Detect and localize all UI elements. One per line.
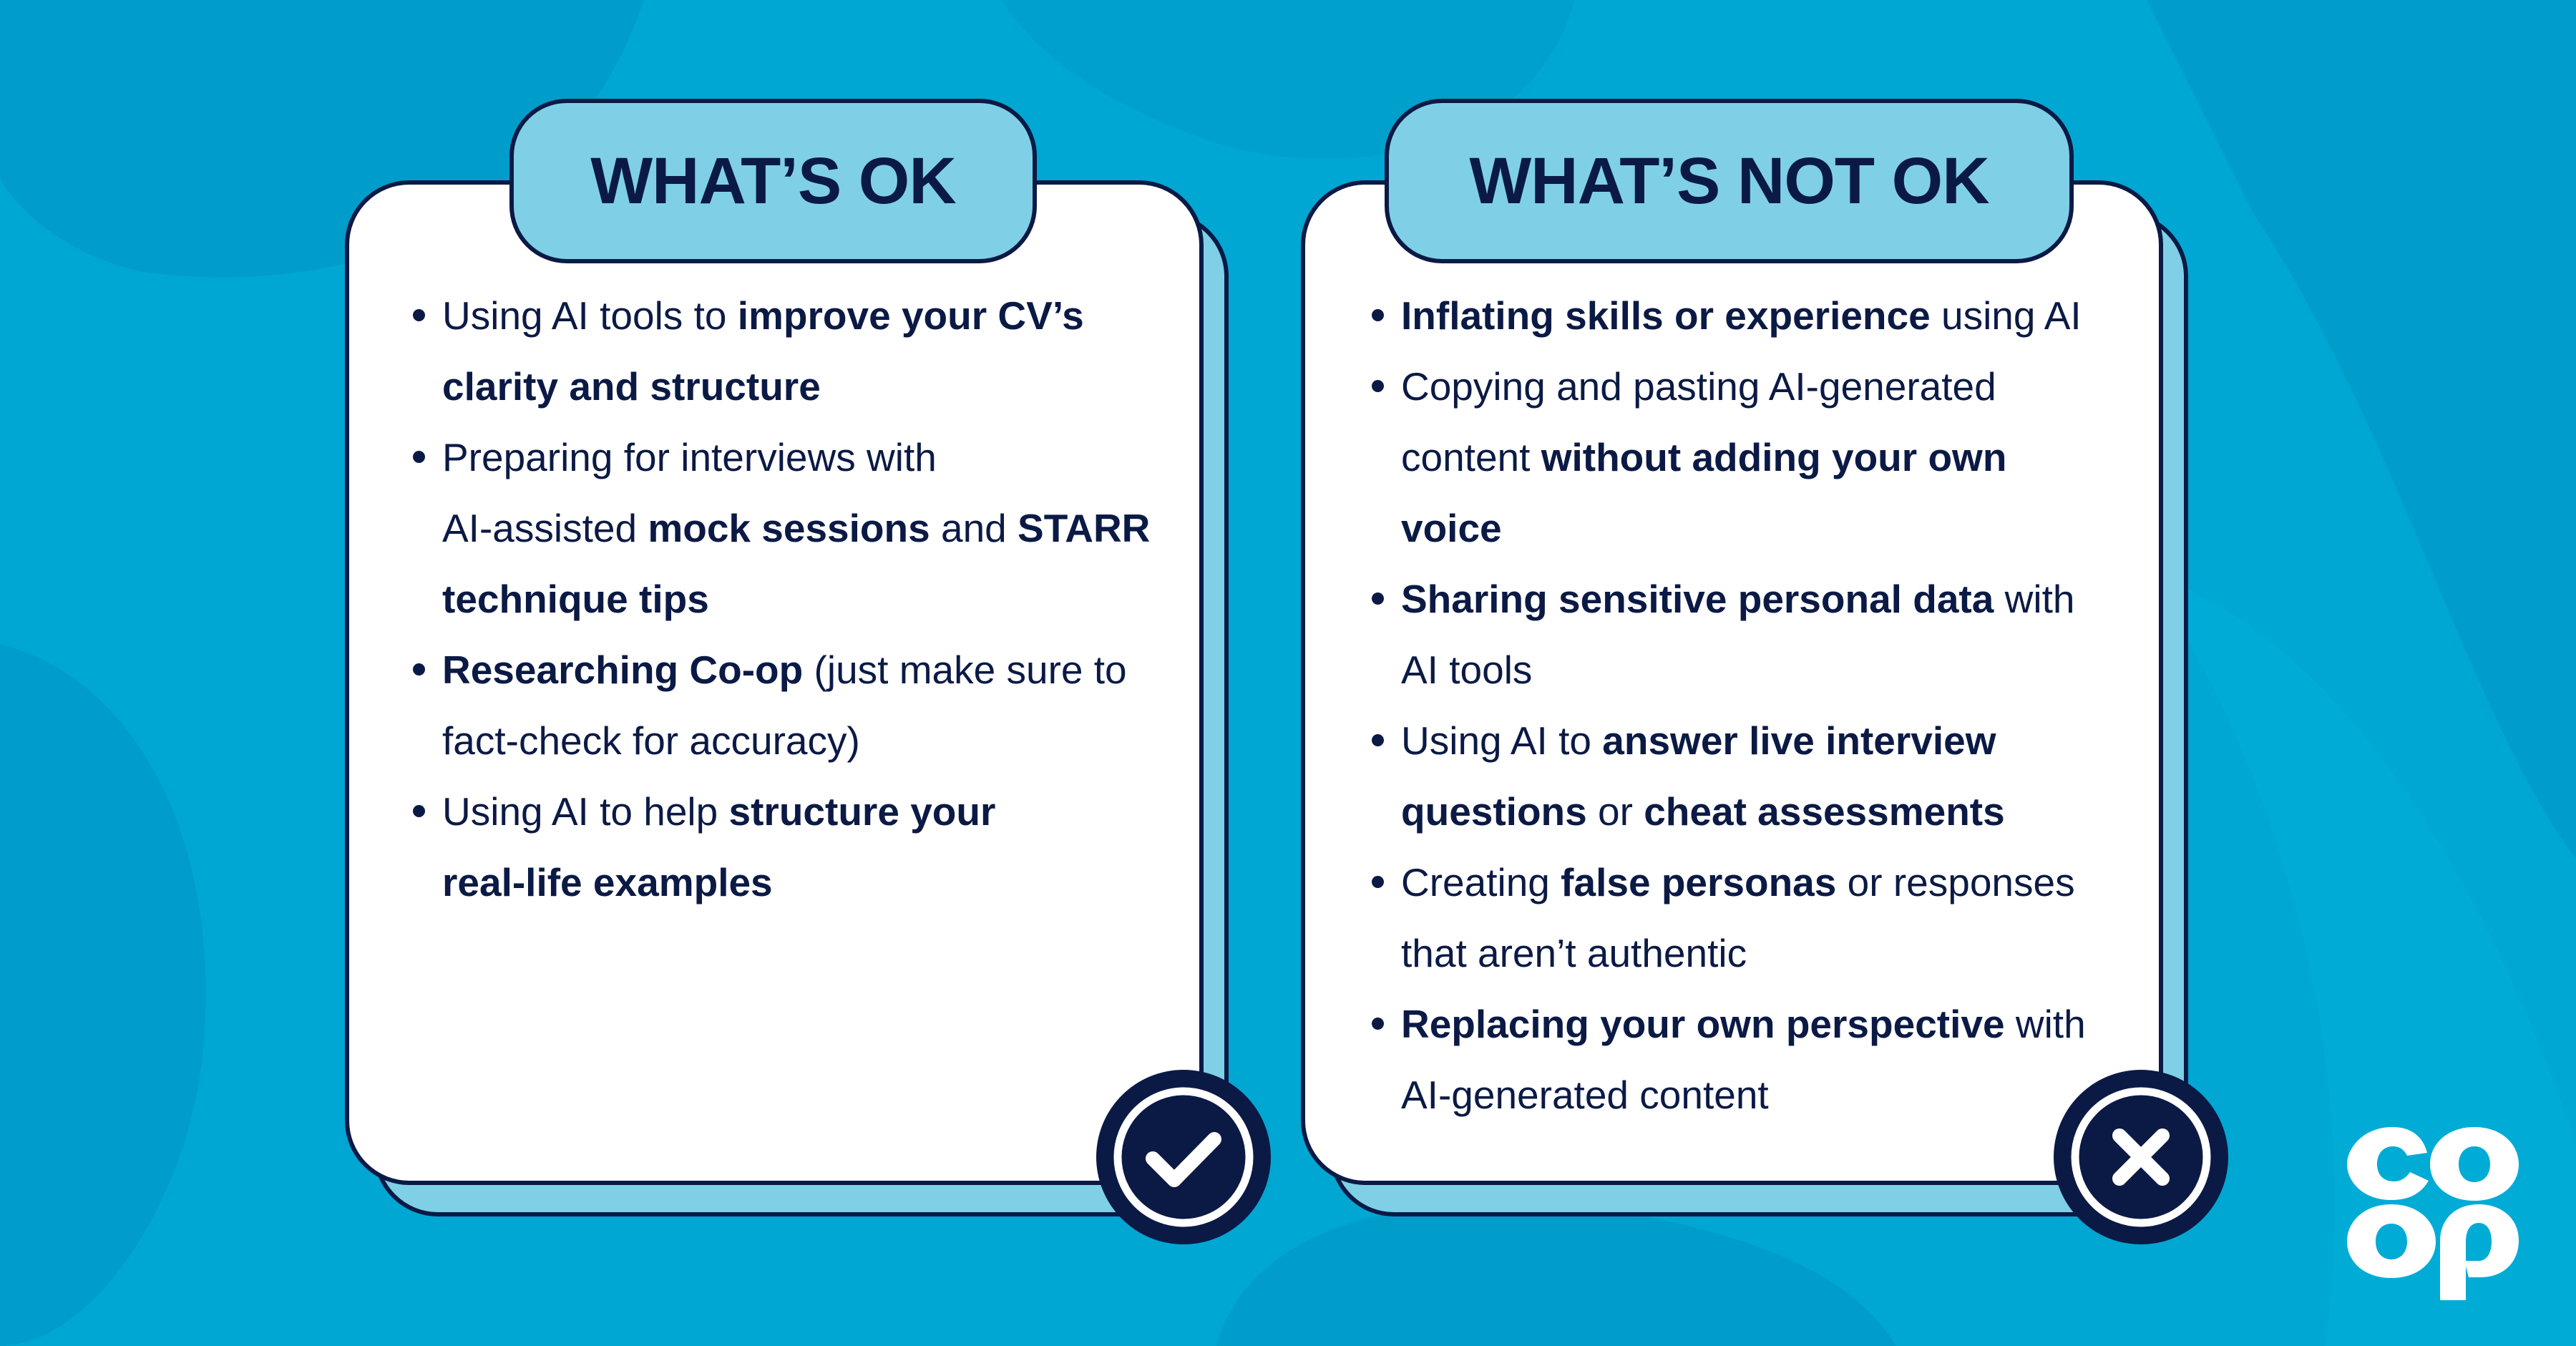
heading: WHAT'S OK xyxy=(509,99,1037,263)
list: not ok items: Sharing sensitive personal data with xyxy=(1401,577,2074,621)
list: not ok items: Copying and pasting AI-generated xyxy=(1401,364,1996,409)
logo: co op xyxy=(2347,1127,2519,1300)
list: ok items: clarity and structure xyxy=(442,364,821,409)
list: not ok items: questions or cheat assessments xyxy=(1401,789,2005,834)
front card xyxy=(1301,180,2163,1185)
heading: WHAT'S OK: WHAT’S OK xyxy=(590,145,956,218)
panel: what's ok xyxy=(345,99,1271,1244)
list: ok items: fact-check for accuracy) xyxy=(442,718,860,763)
list: not ok items: Creating false personas or responses xyxy=(1401,860,2075,904)
list: not ok items: voice xyxy=(1401,506,1502,550)
list: ok items: Using AI to help structure your xyxy=(442,789,995,834)
list: not ok items: that aren’t authentic xyxy=(1401,931,1747,975)
front card xyxy=(345,180,1204,1185)
list: ok items: technique tips xyxy=(442,577,709,621)
list: not ok items: AI-generated content xyxy=(1401,1073,1769,1117)
list: not ok items: Using AI to answer live interview xyxy=(1401,718,1996,763)
list: not ok items: AI tools xyxy=(1401,648,1532,692)
list: ok items: real-life examples xyxy=(442,860,773,904)
list: not ok items xyxy=(1372,293,2225,1237)
back card xyxy=(1330,212,2188,1216)
list: ok items: Using AI tools to improve your CV’s xyxy=(442,293,1084,338)
icon: cross xyxy=(2054,1070,2228,1244)
list: ok items xyxy=(413,293,1150,904)
heading: WHAT'S NOT OK xyxy=(1385,99,2074,263)
list: not ok items: content without adding your own xyxy=(1401,435,2006,479)
list: not ok items: Inflating skills or experience using AI xyxy=(1401,293,2082,338)
icon: check xyxy=(1096,1070,1271,1244)
back card xyxy=(374,212,1229,1216)
heading: WHAT'S NOT OK: WHAT’S NOT OK xyxy=(1469,145,1989,218)
list: not ok items: Replacing your own perspective with xyxy=(1401,1002,2086,1046)
list: ok items: Preparing for interviews with xyxy=(442,435,937,479)
list: ok items: AI-assisted mock sessions and STARR xyxy=(442,506,1150,550)
list: ok items: Researching Co-op (just make sure to xyxy=(442,648,1127,692)
panel: what's not ok xyxy=(1301,99,2228,1244)
